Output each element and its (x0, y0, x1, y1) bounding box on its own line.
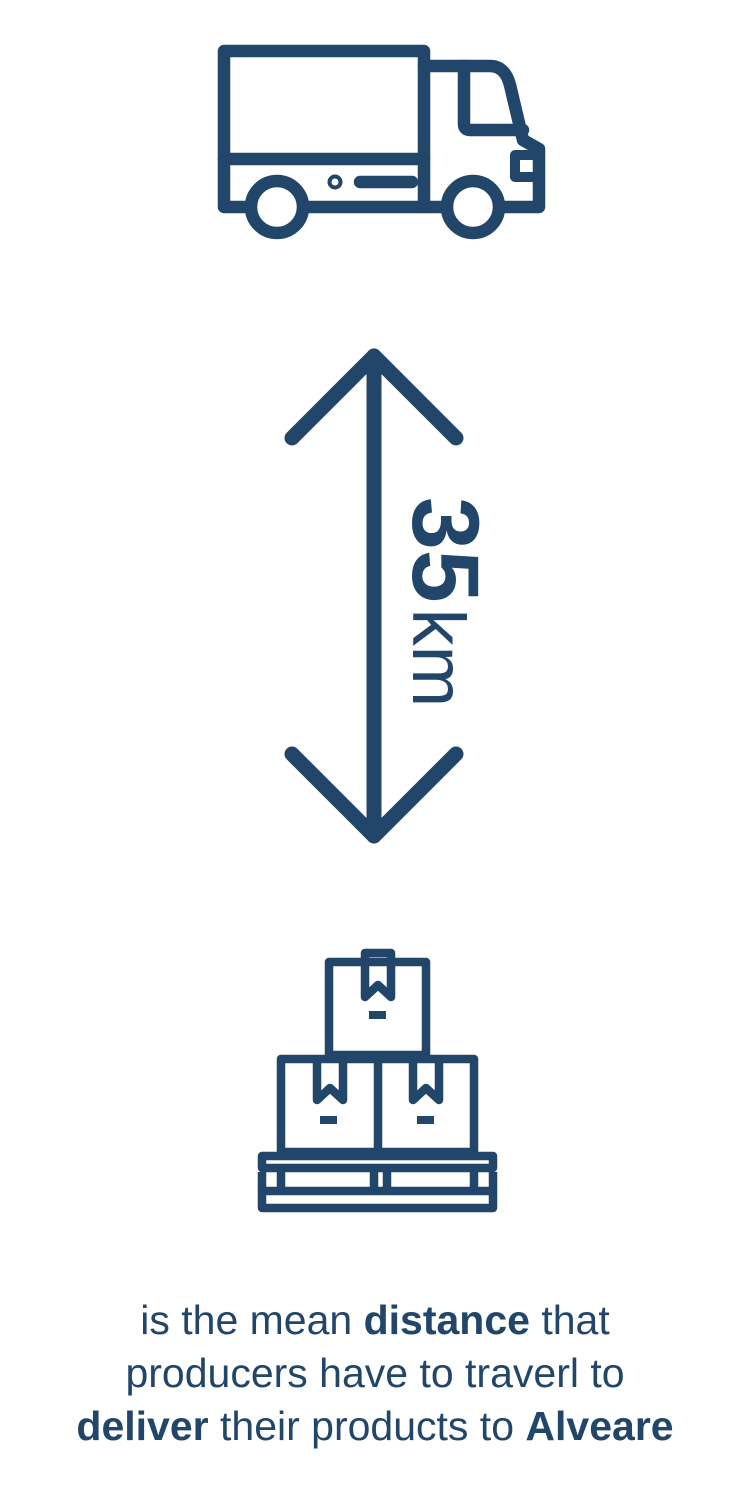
icon: boxes on pallet (262, 953, 493, 1208)
caption text: producers have to traverl to (125, 1350, 625, 1396)
icon: truck (224, 51, 539, 233)
caption text: deliver their products to Alveare (76, 1403, 674, 1449)
label: 35 km: 35 km (392, 497, 498, 707)
caption text (76, 1297, 674, 1449)
arrow: double-headed distance (292, 356, 456, 836)
caption text: is the mean distance that (140, 1297, 610, 1343)
